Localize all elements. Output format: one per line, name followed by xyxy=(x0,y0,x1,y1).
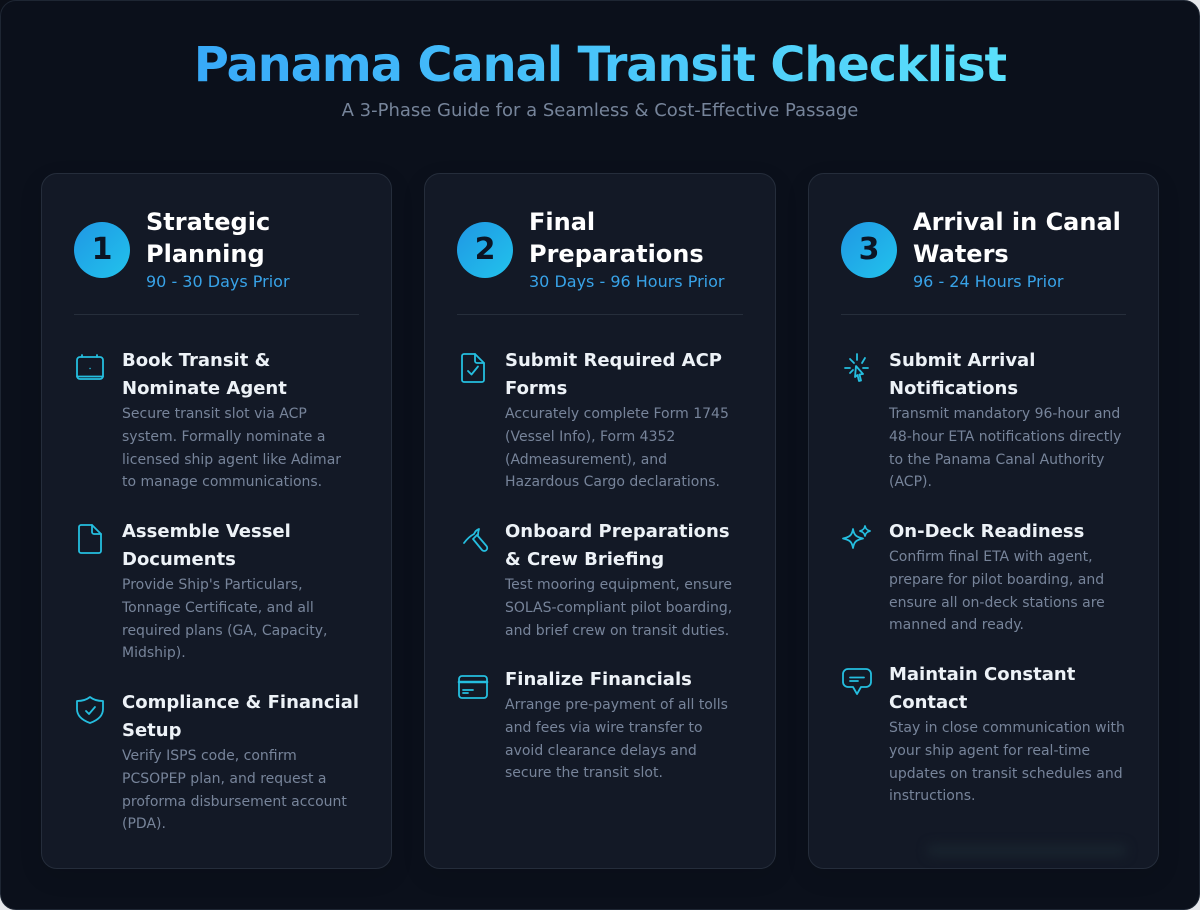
item: arrival notifications: to the Panama Canal Authority xyxy=(889,452,1104,468)
item: finalize financials: and fees via wire transfer to xyxy=(505,720,703,736)
item: assemble documents: Assemble Vessel xyxy=(122,521,291,542)
item: compliance: (PDA). xyxy=(122,816,166,832)
icon: sparkles xyxy=(842,525,871,549)
panel: phase 1 strategic planning xyxy=(41,173,392,869)
item: compliance: Verify ISPS code, confirm xyxy=(122,748,297,764)
item: finalize financials: secure the transit slot. xyxy=(505,765,663,781)
phase 2 heading: Final xyxy=(529,208,595,236)
icon: chat bubble xyxy=(842,668,872,695)
phase 3 number badge xyxy=(841,222,897,278)
item: on-deck readiness: On-Deck Readiness xyxy=(889,521,1084,542)
phase 3 heading xyxy=(913,208,1121,290)
phase 3 heading: 96 - 24 Hours Prior xyxy=(913,272,1063,290)
item: assemble documents: Tonnage Certificate, and all xyxy=(122,600,314,616)
item: finalize financials xyxy=(458,669,728,781)
item: finalize financials: Arrange pre-payment of all tolls xyxy=(505,697,728,713)
item: on-deck readiness: manned and ready. xyxy=(889,617,1024,633)
item: book transit: system. Formally nominate a xyxy=(122,429,325,445)
item: onboard preparations: Test mooring equipment, ensure xyxy=(505,577,732,593)
phase 3 number badge: 3 xyxy=(859,232,879,266)
subtitle: A 3-Phase Guide for a Seamless & Cost-Effective Passage xyxy=(342,100,858,121)
item: submit forms: (Vessel Info), Form 4352 xyxy=(505,429,675,445)
item: book transit xyxy=(76,350,341,490)
item: compliance: Setup xyxy=(122,720,181,741)
item: assemble documents xyxy=(78,521,328,661)
phase 1 heading: 90 - 30 Days Prior xyxy=(146,272,290,290)
icon: document check xyxy=(461,353,485,383)
icon: hammer xyxy=(463,528,488,552)
item: finalize financials: Finalize Financials xyxy=(505,669,692,690)
phase 1 number badge xyxy=(74,222,130,278)
item: submit forms: Accurately complete Form 1745 xyxy=(505,406,729,422)
icon: click pointer xyxy=(844,353,869,382)
item: compliance: proforma disbursement account xyxy=(122,794,347,810)
phase 1 heading: Planning xyxy=(146,240,265,268)
item: arrival notifications: Notifications xyxy=(889,378,1018,399)
phase 2 heading: Preparations xyxy=(529,240,704,268)
item: assemble documents: Provide Ship's Particulars, xyxy=(122,577,303,593)
item: on-deck readiness: ensure all on-deck stations are xyxy=(889,594,1105,610)
phase 2 number badge: 2 xyxy=(475,232,495,266)
icon: calendar xyxy=(76,354,104,380)
item: constant contact: instructions. xyxy=(889,788,975,804)
item: constant contact: Stay in close communication with xyxy=(889,720,1125,736)
item: constant contact xyxy=(842,664,1125,804)
phase 3 heading: Waters xyxy=(913,240,1009,268)
item: book transit: Secure transit slot via ACP xyxy=(122,406,307,422)
item: assemble documents: required plans (GA, Capacity, xyxy=(122,622,328,638)
item: assemble documents: Midship). xyxy=(122,645,186,661)
panel: phase 2 final preparations xyxy=(424,173,776,869)
item: arrival notifications: Submit Arrival xyxy=(889,350,1035,371)
item: submit forms: (Admeasurement), and xyxy=(505,452,667,468)
item: finalize financials: avoid clearance delays and xyxy=(505,742,697,758)
item: onboard preparations: and brief crew on transit duties. xyxy=(505,622,729,638)
phase 1 header xyxy=(74,206,359,315)
phase 2 heading xyxy=(529,208,724,290)
phase 2 heading: 30 Days - 96 Hours Prior xyxy=(529,272,724,290)
item: arrival notifications: 48-hour ETA notifications directly xyxy=(889,429,1121,445)
phase 1 number badge: 1 xyxy=(92,232,112,266)
item: book transit: Book Transit & xyxy=(122,350,270,371)
item: constant contact: Maintain Constant xyxy=(889,664,1075,685)
item: submit forms xyxy=(461,350,729,490)
item: onboard preparations: SOLAS-compliant pilot boarding, xyxy=(505,600,732,616)
item: constant contact: updates on transit schedules and xyxy=(889,766,1123,782)
icon: shield check xyxy=(76,696,104,724)
phase 1 heading xyxy=(146,208,290,290)
panel: phase 3 arrival in canal waters xyxy=(808,173,1159,869)
item: compliance xyxy=(76,692,359,832)
item: on-deck readiness: Confirm final ETA with agent, xyxy=(889,549,1093,565)
item: book transit: to manage communications. xyxy=(122,474,322,490)
phase 3 header xyxy=(841,206,1126,315)
item: constant contact: your ship agent for real-time xyxy=(889,743,1090,759)
phase 2 number badge xyxy=(457,222,513,278)
title: Panama Canal Transit Checklist xyxy=(194,37,1006,93)
phase 1 heading: Strategic xyxy=(146,208,270,236)
item: constant contact: Contact xyxy=(889,692,967,713)
icon: credit card xyxy=(458,675,488,699)
item: arrival notifications: (ACP). xyxy=(889,474,932,490)
icon: document xyxy=(78,524,102,554)
item: book transit: Nominate Agent xyxy=(122,378,287,399)
item: assemble documents: Documents xyxy=(122,549,236,570)
item: book transit: licensed ship agent like Adimar xyxy=(122,452,341,468)
item: compliance: Compliance & Financial xyxy=(122,692,359,713)
item: onboard preparations xyxy=(463,521,732,638)
item: submit forms: Hazardous Cargo declarations. xyxy=(505,474,720,490)
item: on-deck readiness: prepare for pilot boarding, and xyxy=(889,572,1104,588)
item: arrival notifications xyxy=(844,350,1121,490)
phase 2 header xyxy=(457,206,743,315)
phase 3 heading: Arrival in Canal xyxy=(913,208,1121,236)
item: arrival notifications: Transmit mandatory 96-hour and xyxy=(889,406,1120,422)
item: on-deck readiness xyxy=(842,521,1105,633)
item: submit forms: Forms xyxy=(505,378,567,399)
item: onboard preparations: Onboard Preparations xyxy=(505,521,730,542)
item: onboard preparations: & Crew Briefing xyxy=(505,549,664,570)
item: compliance: PCSOPEP plan, and request a xyxy=(122,771,326,787)
item: submit forms: Submit Required ACP xyxy=(505,350,722,371)
